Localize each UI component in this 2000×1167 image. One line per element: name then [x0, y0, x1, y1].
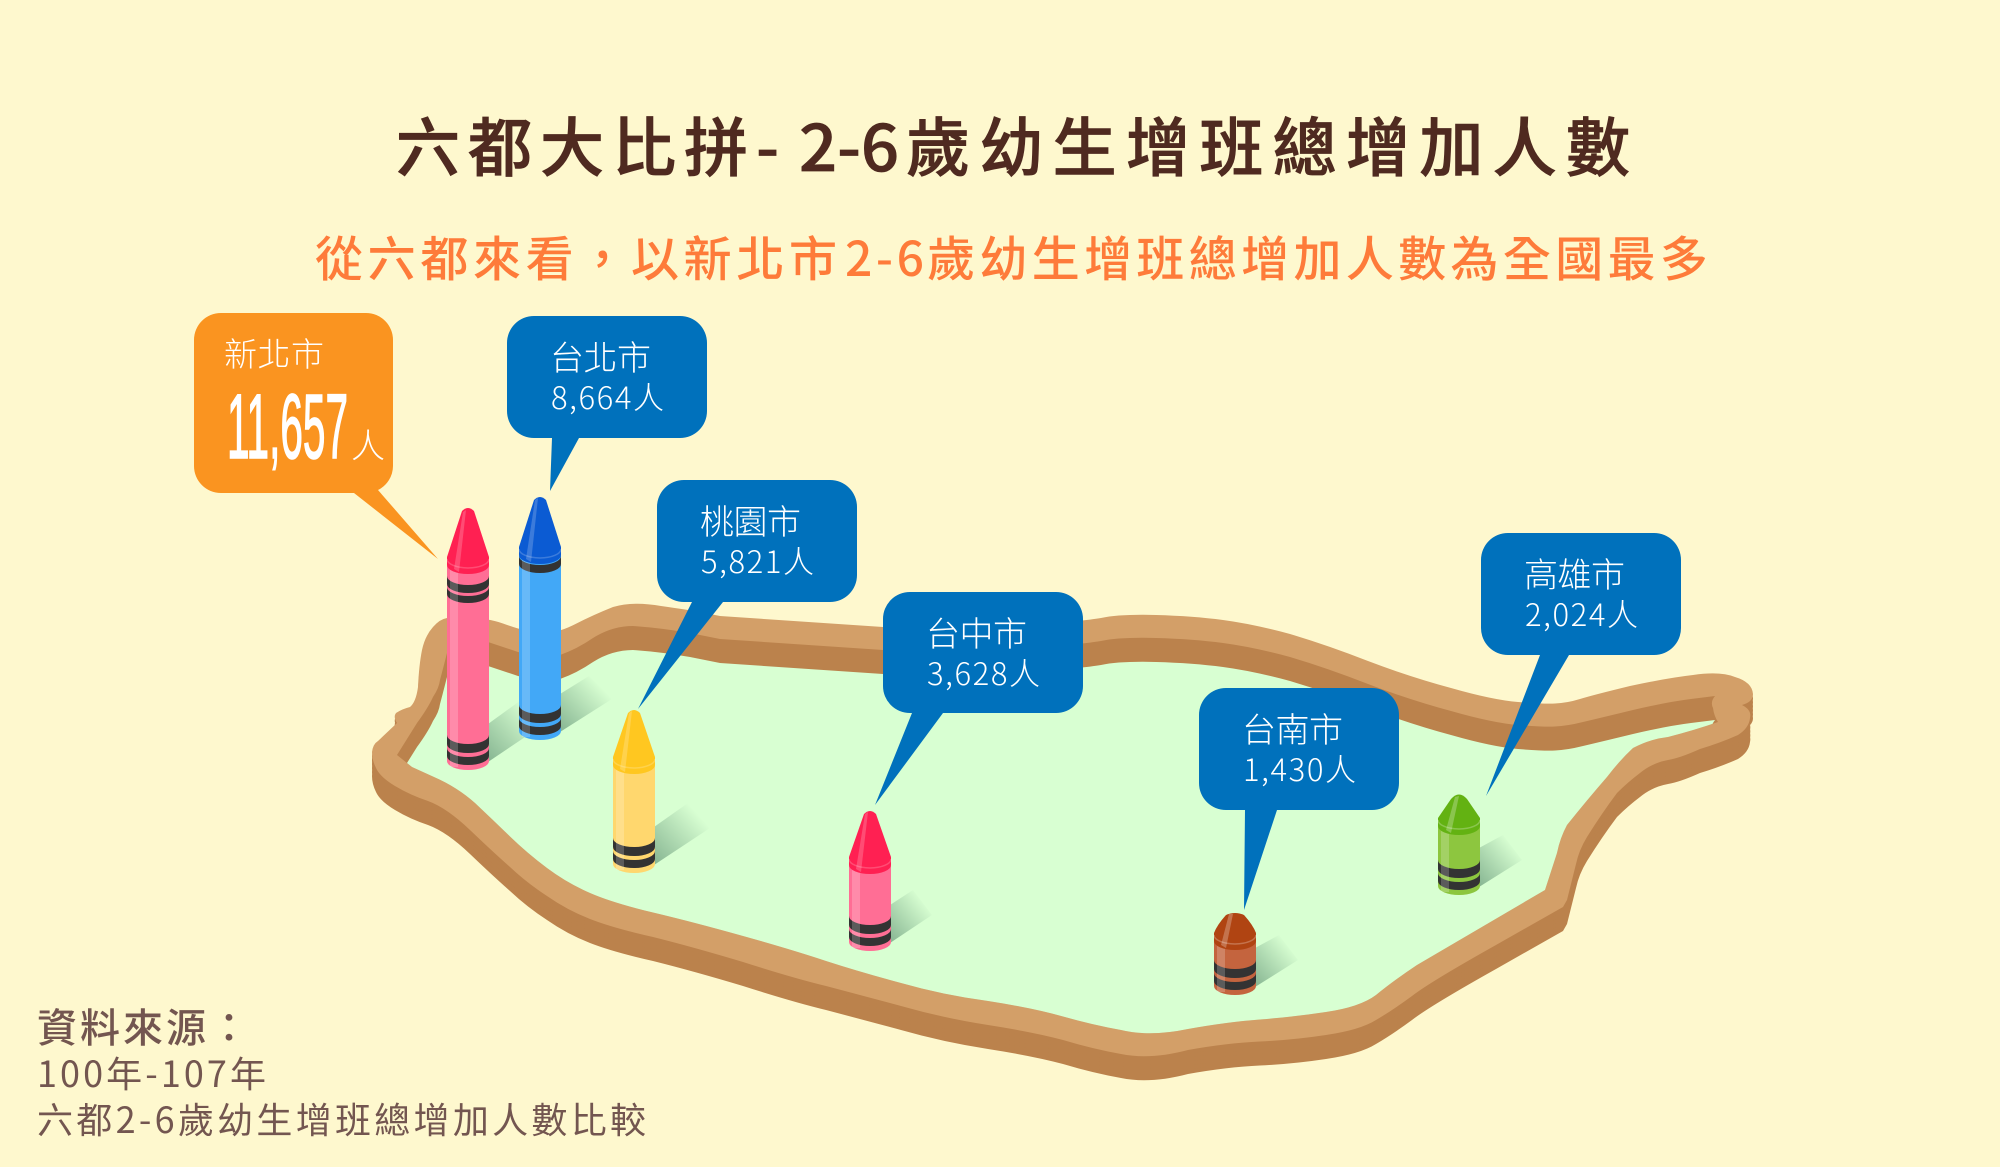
- callout: Taipei: 8,664人: [551, 373, 664, 418]
- callout: Taipei: [507, 316, 707, 491]
- callout: Kaohsiung: 高雄市: [1524, 548, 1625, 597]
- callout: Tainan: [1199, 688, 1399, 910]
- callout: Tainan: 台南市: [1242, 703, 1343, 752]
- crayon: Tainan: [1214, 913, 1298, 995]
- callout: New Taipei: [194, 313, 438, 559]
- callout: New Taipei: 新北市: [224, 328, 324, 376]
- subtitle: [315, 220, 1708, 290]
- subtitle: 歲幼生增班總增加人數為全國最多: [927, 220, 1708, 290]
- source note: 資料來源：: [37, 996, 249, 1054]
- callout: Taoyuan: 桃園市: [700, 495, 801, 544]
- crayon: New Taipei: [447, 508, 543, 770]
- callout: Taoyuan: [638, 480, 857, 709]
- subtitle: 從六都來看，以新北市: [315, 220, 837, 290]
- crayon: Taoyuan: [613, 710, 710, 873]
- callout: Taichung: 3,628人: [927, 649, 1040, 694]
- source note: [37, 996, 646, 1144]
- crayon: Taichung: [849, 811, 932, 951]
- source note: 100年-107年: [37, 1046, 266, 1098]
- callout: Taipei: 台北市: [550, 331, 651, 380]
- callout: Tainan: 1,430人: [1243, 745, 1356, 790]
- map of Taiwan: [372, 604, 1753, 1080]
- title: 2-6: [799, 98, 899, 190]
- callout: Taoyuan: 5,821人: [701, 537, 814, 582]
- title: 歲幼生增班總增加人數: [906, 98, 1630, 190]
- map floor: [397, 650, 1718, 1057]
- callout: Taichung: [875, 592, 1083, 805]
- title: [396, 98, 1630, 190]
- map top rim: [372, 604, 1753, 1056]
- map outer wall: [372, 608, 1753, 1080]
- title: 六都大比拼-: [396, 98, 779, 190]
- crayon: Kaohsiung: [1438, 794, 1522, 895]
- callout: New Taipei: 11,657: [227, 376, 348, 478]
- subtitle: 2-6: [845, 220, 924, 290]
- crayon: Taipei: [519, 497, 612, 740]
- callout: Taichung: 台中市: [926, 607, 1027, 656]
- map inner wall: [397, 626, 1718, 1033]
- callout: Kaohsiung: [1481, 533, 1681, 796]
- callout: New Taipei: 人: [351, 419, 385, 468]
- callout: Kaohsiung: 2,024人: [1525, 590, 1638, 635]
- source note: 六都2-6歲幼生增班總增加人數比較: [37, 1092, 646, 1144]
